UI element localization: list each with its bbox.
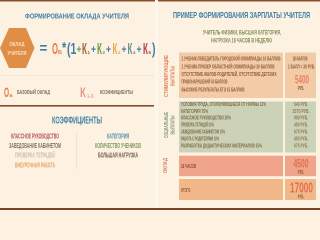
- legend: base salary: Б: [10, 93, 14, 98]
- legend: base salary: [4, 86, 50, 101]
- formula: +: [106, 44, 111, 56]
- list: second coefficient group: КОЛИЧЕСТВО УЧЕНИКОВ: [95, 143, 141, 150]
- row: social payments: 540 РУБ.: [294, 102, 308, 108]
- row: total: ИТОГО:: [181, 188, 191, 194]
- icon: salary hexagon: [0, 28, 34, 68]
- heading: coefficients: КОЭФФИЦИЕНТЫ: [52, 116, 102, 126]
- list: second coefficient group: [95, 134, 141, 160]
- row: base salary: РУБ.: [298, 170, 305, 176]
- icon: salary hexagon: ОКЛАД: [10, 42, 24, 48]
- list: first coefficient group: ПРОВЕРКА ТЕТРАДЕЙ: [15, 150, 55, 160]
- panel: base salary formula: [0, 12, 156, 101]
- row: social payments: КАТЕГОРИЯ 75%: [181, 109, 208, 115]
- subtitle: teacher profile: НАГРУЗКА 18 ЧАСОВ В НЕДЕЛЮ: [211, 38, 272, 44]
- row: social payments: 675 РУБ.: [294, 144, 308, 150]
- row: base salary: 4500: [294, 159, 308, 171]
- formula: 3: [118, 50, 121, 55]
- row: base salary: 18 ЧАСОВ: [181, 164, 196, 170]
- row: stimulating payments: 5400: [295, 74, 309, 86]
- formula: =: [40, 40, 47, 57]
- legend: base salary: БАЗОВЫЙ ОКЛАД: [17, 88, 50, 96]
- formula: (1: [67, 40, 76, 58]
- formula: 1: [88, 50, 90, 55]
- row: social payments: ВЫПЛАТЫ: [170, 115, 176, 134]
- row: stimulating payments: ВЫПЛАТЫ: [170, 66, 176, 86]
- formula: [40, 39, 156, 58]
- legend: coefficients: [80, 85, 133, 100]
- formula: 4: [133, 50, 136, 55]
- formula: К: [82, 40, 87, 58]
- legend: coefficients: 1–5: [87, 94, 94, 100]
- row: social payments: ПРОВЕРКА ТЕТРАДЕЙ 10%: [181, 120, 214, 128]
- formula: +: [122, 44, 127, 56]
- formula: ): [152, 40, 156, 58]
- formula: К: [112, 40, 118, 58]
- list: first coefficient group: [9, 134, 61, 170]
- row: social payments: 3370 РУБ.: [292, 109, 310, 115]
- formula: О: [52, 40, 58, 58]
- row: social payments: 450 РУБ.: [294, 136, 308, 142]
- row: social payments: [164, 102, 316, 152]
- formula: *: [62, 39, 67, 56]
- row: social payments: 675 РУБ.: [294, 130, 308, 136]
- formula: К: [143, 40, 148, 58]
- formula: Б: [58, 50, 62, 56]
- row: stimulating payments: РУБ.: [298, 86, 305, 92]
- formula: 2: [102, 50, 106, 55]
- row: social payments: ЗАВЕДОВАНИЕ КАБИНЕТОМ 15%: [181, 130, 225, 136]
- row: stimulating payments: ПРАВОНАРУШЕНИЙ 50 БАЛЛОВ: [182, 78, 228, 86]
- list: first coefficient group: ВНЕУРОЧНАЯ РАБОТА: [15, 162, 55, 170]
- list: second coefficient group: БОЛЬШАЯ НАГРУЗКА: [98, 152, 138, 160]
- row: stimulating payments: ВЫСОКИЕ РЕЗУЛЬТАТЫ ЕГЭ 15 БАЛЛОВ: [182, 87, 244, 93]
- row: stimulating payments: СТИМУЛИРУЮЩИЕ: [164, 54, 170, 97]
- heading: salary formation: ФОРМИРОВАНИЕ ОКЛАДА УЧИТЕЛЯ: [25, 12, 129, 20]
- legend: coefficients: К: [80, 85, 86, 100]
- list: first coefficient group: ЗАВЕДОВАНИЕ КАБИНЕТОМ: [9, 143, 61, 150]
- row: social payments: 900 РУБ.: [294, 116, 308, 122]
- formula: +: [136, 44, 142, 56]
- formula: К: [128, 40, 133, 58]
- list: second coefficient group: КАТЕГОРИЯ: [107, 134, 129, 140]
- row: social payments: РАЗРАБОТКА ДИДАКТИЧЕСКИХ МАТЕРИАЛОВ 15%: [181, 144, 262, 150]
- legend: base salary: О: [4, 86, 9, 101]
- panel: coefficients: [9, 116, 141, 170]
- formula: +: [91, 44, 96, 56]
- row: base salary: ОКЛАД: [163, 158, 169, 173]
- row: stimulating payments: [164, 52, 316, 98]
- row: base salary: [163, 156, 316, 176]
- row: total: [179, 179, 316, 200]
- subtitle: teacher profile: [203, 30, 281, 44]
- row: social payments: 450 РУБ.: [294, 122, 308, 128]
- row: social payments: СОЦИАЛЬНЫЕ: [164, 112, 170, 138]
- formula: К: [97, 40, 102, 58]
- row: social payments: РАБОТА С РОДИТЕЛЯМИ 10%: [181, 136, 219, 142]
- legend: coefficients: КОЭФФИЦИЕНТЫ: [100, 90, 133, 96]
- row: social payments: КЛАССНОЕ РУКОВОДСТВО 20%: [181, 116, 231, 122]
- icon: salary hexagon: УЧИТЕЛЯ: [8, 51, 26, 57]
- panel: salary example: [163, 10, 316, 200]
- list: first coefficient group: КЛАССНОЕ РУКОВОДСТВО: [11, 134, 59, 140]
- row: total: РУБ.: [298, 194, 305, 200]
- formula: 5: [148, 50, 152, 55]
- formula: +: [76, 44, 82, 56]
